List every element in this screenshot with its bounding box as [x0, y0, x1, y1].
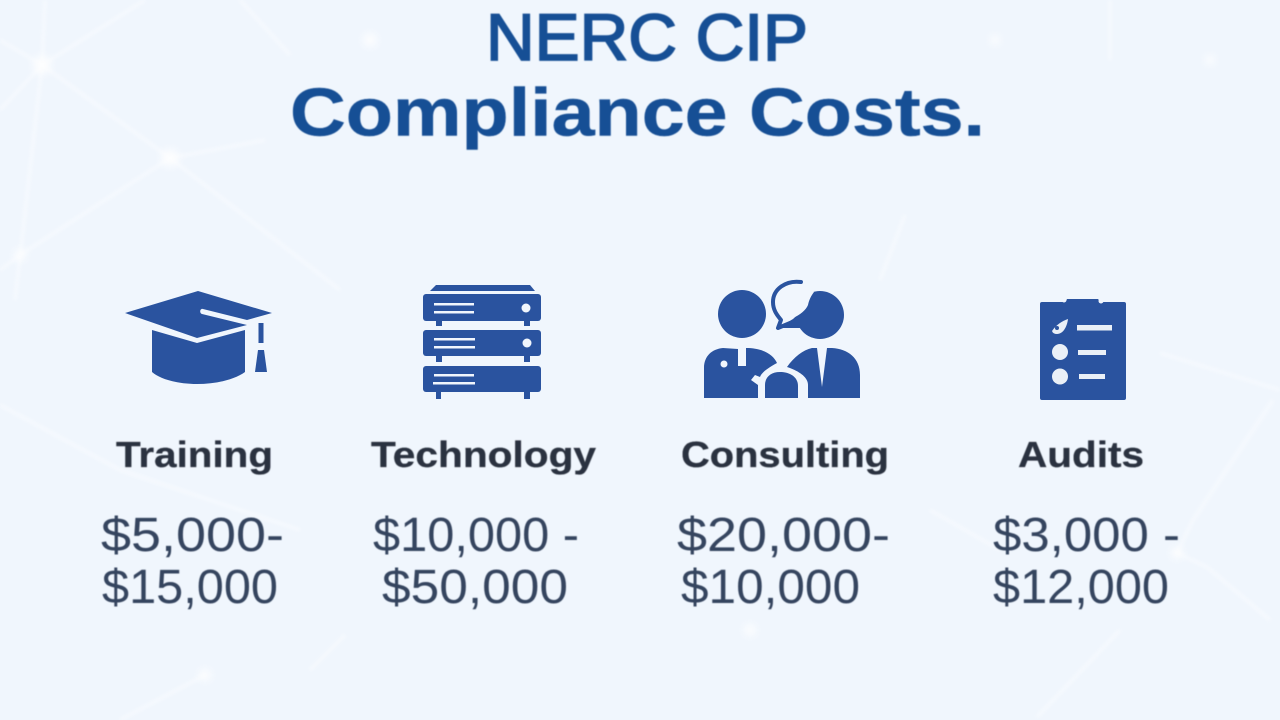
- label: Audits: Audits: [1018, 434, 1144, 475]
- label: Training: Training: [116, 434, 273, 475]
- icon: clipboard checklist: [1040, 298, 1126, 400]
- title line: Compliance Costs.: Compliance Costs.: [290, 74, 985, 150]
- cost: Consulting: [677, 509, 890, 614]
- cost: Technology: [373, 509, 579, 614]
- panel: audits: [993, 298, 1180, 614]
- panel: consulting: [677, 282, 890, 614]
- panel: technology: [371, 285, 596, 614]
- title line: NERC CIP: NERC CIP: [486, 0, 808, 74]
- cost: Training: $5,000-: [101, 509, 284, 562]
- panel: training: [101, 291, 284, 614]
- cost: Consulting: $10,000: [681, 561, 860, 614]
- cost: Technology: $10,000 -: [373, 509, 579, 562]
- label: Technology: Technology: [371, 434, 596, 475]
- cost: Technology: $50,000: [382, 561, 568, 614]
- icon: server rack: [423, 285, 541, 399]
- cost: Training: $15,000: [102, 561, 278, 614]
- title: [290, 0, 985, 150]
- icon: graduation cap: [125, 291, 272, 384]
- cost: Training: [101, 509, 284, 614]
- icon: two consultants with speech bubble: [704, 282, 860, 398]
- cost: Audits: [993, 509, 1180, 614]
- label: Consulting: Consulting: [681, 434, 889, 475]
- cost: Audits: $12,000: [993, 561, 1169, 614]
- cost: Audits: $3,000 -: [993, 509, 1180, 562]
- cost: Consulting: $20,000-: [677, 509, 890, 562]
